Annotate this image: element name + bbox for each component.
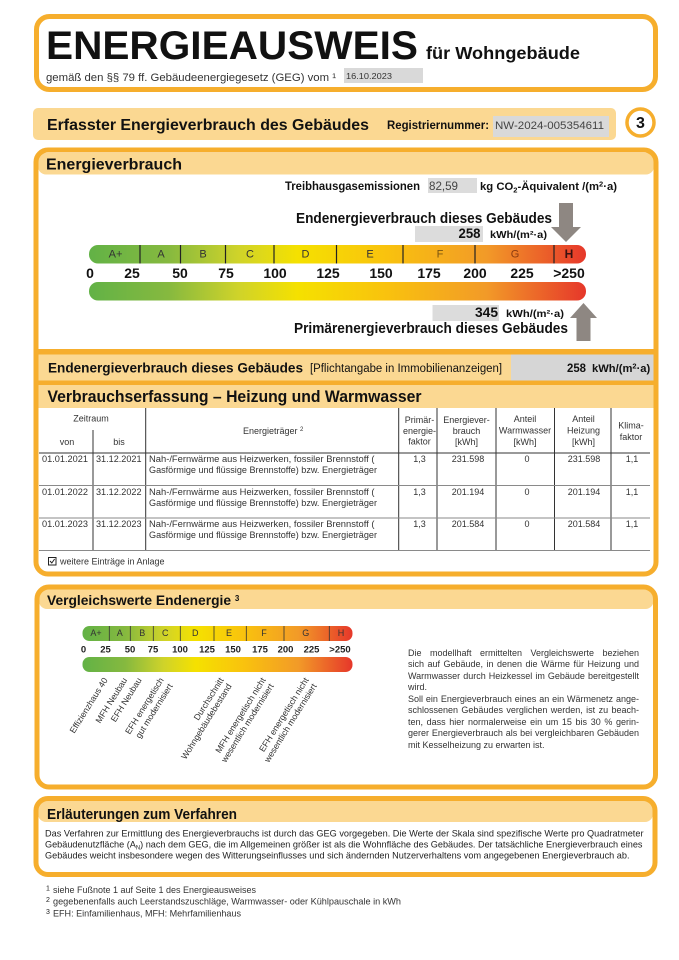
section header bar (33, 108, 616, 140)
row 2022: 201.194 (568, 487, 600, 497)
rotated building type labels: Wohngebäudebestand (179, 682, 234, 761)
comparison values text block: schlossenen Gebäudes verglichen werden, ist zu beach- (408, 705, 639, 715)
comparison scale numbers: 50 (125, 644, 135, 656)
greenhouse gas emissions: kg CO (480, 181, 513, 193)
row 2022: Nah-/Fernwärme aus Heizwerken, fossiler Brennstoff ( (149, 487, 374, 497)
mandatory final energy line: kWh/(m (592, 363, 632, 375)
scale numbers: 200 (463, 265, 487, 281)
primary energy value (432, 304, 564, 321)
row 2021: 1,3 (413, 454, 426, 464)
scale bar with energy classes: C (246, 248, 254, 260)
explanation text: N (136, 846, 140, 852)
footnotes: EFH: Einfamilienhaus, MFH: Mehrfamilienhaus (53, 908, 241, 920)
final energy value: 258 (458, 225, 481, 241)
scale numbers: 0 (86, 265, 94, 281)
comparison scale numbers: 225 (304, 644, 320, 656)
comparison scale numbers: 0 (81, 644, 86, 656)
row 2022: 1,3 (413, 487, 426, 497)
comparison scale numbers: 100 (172, 644, 188, 656)
row 2023 (42, 519, 638, 540)
scale numbers: 100 (263, 265, 287, 281)
comparison values text block: mit Kesselheizung zu erwarten ist. (408, 740, 545, 750)
scale numbers: 225 (510, 265, 534, 281)
column headers: bis (113, 437, 125, 447)
greenhouse gas emissions: ·a) (603, 181, 617, 193)
rotated building type labels: EFH Neubau (109, 676, 144, 724)
date field: 16.10.2023 (346, 71, 392, 81)
comparison scale numbers: 150 (225, 644, 241, 656)
scale bar with energy classes: G (511, 248, 519, 260)
rotated building type labels: Effizienzhaus 40 (68, 676, 110, 735)
rotated building type labels: Durchschnitt (192, 675, 226, 722)
greenhouse gas emissions: Treibhausgasemissionen (285, 181, 420, 193)
scale numbers: 50 (172, 265, 188, 281)
row 2023: 201.584 (452, 519, 484, 529)
comparison scale: H (338, 628, 344, 638)
footnotes: siehe Fußnote 1 auf Seite 1 des Energieausweises (53, 885, 256, 896)
explanation text: Gebäudenutzfläche (A (45, 840, 138, 850)
page number badge (627, 109, 654, 136)
column headers: von (60, 437, 74, 447)
section heading: Erfasster Energieverbrauch des Gebäudes (47, 117, 369, 134)
comparison values text block: Die modellhaft ermittelten Vergleichswerte beziehen (408, 648, 639, 658)
explanation text: Das Verfahren zur Ermittlung des Energieverbrauchs ist durch das GEG vorgegeben. Die Werte der Skala sind spezifische Werte pro Quadratmeter (45, 828, 644, 838)
comparison values text block: gerer Energieverbrauch als bei vergleichbaren Gebäuden (408, 728, 639, 738)
row 2022: Gasförmige und flüssige Brennstoffe) bzw. Energieträger (149, 498, 377, 508)
row 2021 (42, 454, 638, 475)
mandatory final energy line: Endenergieverbrauch dieses Gebäudes (48, 360, 303, 376)
rotated building type labels: MFH energetisch nicht (213, 675, 268, 755)
comparison scale: C (162, 628, 169, 638)
registration number label: Registriernummer: (387, 120, 489, 132)
arrow: primary energy marker (570, 303, 597, 341)
scale numbers: 150 (369, 265, 393, 281)
rotated building type labels: EFH energetisch (123, 676, 166, 736)
column headers (60, 414, 644, 447)
row 2023: 0 (524, 519, 530, 529)
legal basis line: gemäß den §§ 79 ff. Gebäudeenergiegesetz (GEG) vom ¹ (46, 72, 336, 84)
main title: ENERGIEAUSWEIS (46, 24, 418, 68)
panel: Erläuterungen (36, 798, 655, 874)
scale bar with energy classes (89, 245, 586, 264)
row 2021: 01.01.2021 (42, 454, 88, 464)
column headers: Klima- (618, 420, 644, 430)
heading: Vergleichswerte: 3 (235, 594, 240, 603)
greenhouse gas emissions: -Äquivalent /(m (517, 180, 599, 193)
column headers: [kWh] (455, 437, 478, 447)
column headers: Heizung (567, 426, 600, 436)
greenhouse gas emissions: 2 (599, 180, 603, 188)
row 2022: 201.194 (452, 487, 484, 497)
icon: checked box with note: weitere Einträge in Anlage (59, 556, 164, 566)
registration number field (493, 116, 609, 137)
scale bar with energy classes: D (302, 248, 310, 260)
row 2022: 31.12.2022 (96, 487, 142, 497)
row 2021: 231.598 (452, 454, 484, 464)
mandatory final energy line: 2 (632, 362, 637, 370)
comparison scale numbers: 200 (278, 644, 293, 656)
comparison scale: A (117, 628, 123, 638)
consumption table (39, 408, 650, 550)
comparison values text block: Soll ein Energieverbrauch eines an ein Wärmenetz ange- (408, 694, 639, 704)
final energy value (415, 225, 547, 242)
explanation text (45, 828, 644, 860)
primary energy value: kWh/(m²·a) (506, 308, 564, 320)
comparison values text block: Warmwasser durch Heizkessel im Gebäude bereitgestellt (408, 670, 639, 680)
column headers: Zeitraum (73, 414, 109, 424)
table grid (93, 408, 611, 550)
footnotes: gegebenenfalls auch Leerstandszuschläge, Warmwasser- oder Kühlpauschale in kWh (53, 896, 401, 908)
comparison values text block (408, 648, 639, 750)
panel: Vergleichswerte (37, 587, 656, 787)
column headers: Anteil (572, 414, 595, 424)
rotated building type labels (68, 675, 319, 765)
row 2021: 31.12.2021 (96, 454, 142, 464)
comparison scale: G (302, 628, 309, 638)
comparison scale numbers: 25 (100, 644, 111, 656)
arrow: final energy marker (551, 203, 581, 242)
column headers: 2 (300, 427, 304, 433)
row 2022: 01.01.2022 (42, 487, 88, 497)
row 2022: 1,1 (626, 487, 638, 497)
comparison values text block: wird. (408, 682, 427, 692)
greenhouse gas emissions: 82,59 (429, 181, 458, 193)
column headers: Primär- (405, 415, 434, 425)
scale bar with energy classes: H (565, 247, 573, 261)
comparison values text block: ten, dass hier normalerweise ein um 15 bis 30 % gerin- (408, 716, 639, 726)
row 2022: 0 (524, 487, 530, 497)
rotated building type labels: wesentlich modernisiert (219, 681, 276, 765)
greenhouse gas emissions: 2 (513, 186, 517, 194)
scale numbers (86, 265, 585, 281)
rotated building type labels: gut modernisiert (133, 681, 175, 740)
column headers: faktor (620, 432, 642, 442)
comparison values text block: sich auf Gebäude, in denen die Wärme für Heizung und (408, 659, 639, 669)
column headers: Anteil (514, 414, 536, 424)
row 2023: 201.584 (568, 519, 600, 529)
row 2021: Nah-/Fernwärme aus Heizwerken, fossiler Brennstoff ( (149, 454, 374, 464)
heading: Erläuterungen: Erläuterungen zum Verfahren (47, 806, 237, 823)
mandatory final energy line (48, 360, 651, 376)
scale numbers: 25 (124, 265, 140, 281)
panel: Energieverbrauch (36, 150, 656, 574)
column headers: Energieträger (243, 426, 298, 436)
footnotes: 2 (46, 897, 50, 904)
gradient bar (89, 282, 586, 300)
heading: Energieverbrauch: Energieverbrauch (46, 156, 182, 174)
scale bar with energy classes: A (157, 248, 165, 260)
header band: Verbrauchserfassung (38, 385, 654, 408)
scale numbers: 175 (417, 265, 441, 281)
comparison scale (82, 626, 352, 641)
subtitle: für Wohngebäude (426, 43, 580, 63)
mandatory final energy line: ·a) (637, 363, 651, 375)
row 2023: 31.12.2023 (96, 519, 142, 529)
header band (38, 153, 654, 174)
heading: Verbrauchserfassung: Verbrauchserfassung – Heizung und Warmwasser (48, 388, 422, 406)
scale bar with energy classes: A+ (109, 248, 122, 260)
comparison scale numbers: 175 (252, 644, 269, 656)
row 2023: Nah-/Fernwärme aus Heizwerken, fossiler Brennstoff ( (149, 519, 374, 529)
column headers: [kWh] (572, 437, 595, 447)
header band (39, 589, 654, 609)
scale numbers: 75 (218, 265, 234, 281)
mandatory final energy line: 258 (567, 363, 587, 375)
header band (38, 801, 653, 822)
column headers: energie- (403, 426, 436, 436)
scale bar with energy classes: B (199, 248, 207, 260)
comparison scale numbers (81, 644, 351, 656)
explanation text: Gebäudes weicht insbesondere wegen des Witterungseinflusses und sich ändernden Nutzerverhaltens vom angegebenen Energieverbrauch ab. (45, 850, 630, 860)
scale bar with energy classes: E (366, 248, 374, 260)
scale numbers: 125 (316, 265, 340, 281)
footnotes: 3 (46, 909, 50, 916)
column headers: Energiever- (443, 415, 490, 425)
comparison scale numbers: 125 (199, 644, 216, 656)
title panel (36, 16, 656, 90)
summary band (38, 349, 654, 385)
comparison scale: A+ (90, 628, 102, 638)
column headers: faktor (408, 436, 431, 446)
comparison scale: B (139, 628, 145, 638)
row 2023: 1,3 (413, 519, 426, 529)
row 2023: 01.01.2023 (42, 519, 88, 529)
rotated building type labels: MFH Neubau (93, 676, 129, 725)
registration number field: NW-2024-005354611 (495, 120, 604, 132)
row 2022 (42, 487, 638, 508)
primary energy label: Primärenergieverbrauch dieses Gebäudes (294, 321, 568, 337)
scale bar with energy classes: F (437, 248, 444, 260)
final energy value: kWh/(m²·a) (490, 229, 547, 241)
row 2021: Gasförmige und flüssige Brennstoffe) bzw. Energieträger (149, 465, 377, 475)
rotated building type labels: wesentlich modernisiert (262, 681, 319, 765)
comparison scale: E (226, 628, 232, 638)
column headers: [kWh] (513, 437, 537, 447)
explanation text: ) nach dem GEG, die im Allgemeinen größer ist als die Wohnfläche des Gebäudes. Der tatsächliche Energieverbrauch eines (140, 840, 643, 850)
comparison gradient bar (82, 657, 352, 672)
row 2021: 231.598 (568, 454, 600, 464)
rotated building type labels: EFH energetisch nicht (257, 675, 311, 754)
row 2021: 0 (524, 454, 530, 464)
footnotes: 1 (46, 886, 50, 892)
row 2023: 1,1 (626, 519, 638, 529)
row 2021: 1,1 (626, 454, 638, 464)
row 2023: Gasförmige und flüssige Brennstoffe) bzw. Energieträger (149, 530, 377, 540)
final energy label: Endenergieverbrauch dieses Gebäudes (296, 211, 552, 227)
comparison scale numbers: >250 (329, 644, 351, 656)
mandatory final energy line: [Pflichtangabe in Immobilienanzeigen] (310, 363, 502, 375)
column headers: brauch (453, 426, 480, 436)
scale numbers: >250 (553, 265, 585, 281)
greenhouse gas emissions (285, 178, 617, 194)
date field (344, 68, 423, 83)
comparison scale numbers: 75 (148, 644, 159, 656)
comparison scale: F (261, 628, 267, 638)
primary energy value: 345 (475, 304, 498, 320)
footnotes (46, 885, 401, 920)
page number badge: 3 (636, 115, 645, 132)
column headers: Warmwasser (499, 426, 551, 436)
heading: Vergleichswerte: Vergleichswerte Endenergie (47, 593, 231, 608)
comparison scale: D (192, 628, 199, 638)
